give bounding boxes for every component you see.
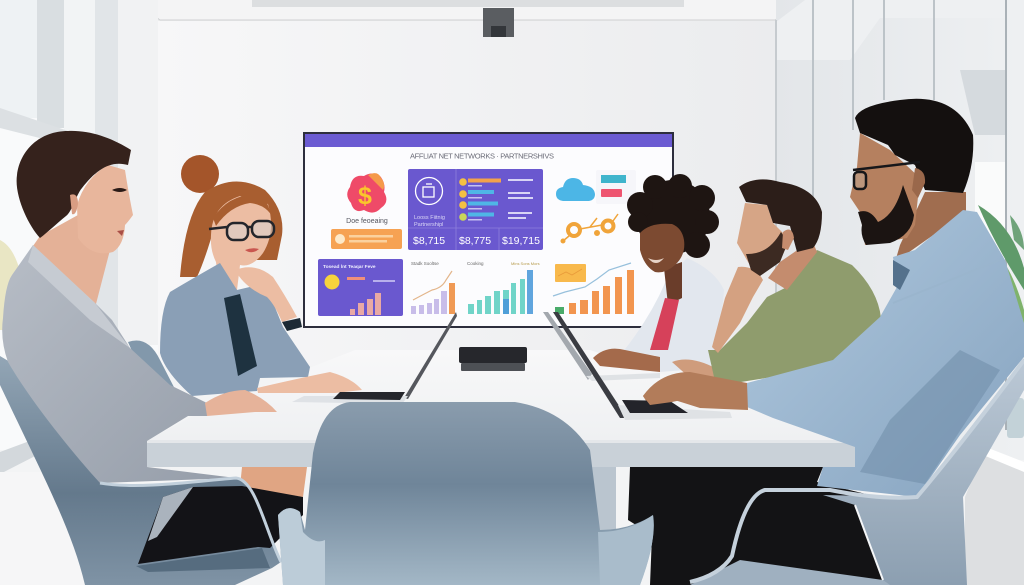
hair [180, 155, 282, 277]
left windows [0, 0, 158, 474]
hair [739, 179, 822, 252]
face [850, 133, 920, 245]
face [737, 203, 790, 275]
ceiling [0, 0, 1024, 22]
glasses [853, 162, 920, 189]
stat values [413, 235, 540, 247]
lips [245, 248, 259, 252]
glasses [209, 221, 274, 240]
lapel [28, 245, 130, 348]
icon: network circle [416, 178, 442, 204]
afro [627, 174, 719, 258]
table [147, 350, 855, 537]
left foreground laptop [292, 312, 457, 404]
forearm and hand [643, 372, 748, 410]
person: woman with glasses and bun [128, 155, 362, 396]
icon: cloud [556, 178, 595, 201]
chair arms [278, 508, 325, 585]
orange button [331, 229, 402, 249]
purple mini chart panel: Tosead lnt Teaqar Feve [323, 264, 376, 270]
blazer [160, 263, 310, 396]
forearm and hand [593, 349, 660, 372]
teal bar chart [467, 261, 540, 314]
right glass wall [775, 0, 1024, 585]
progress bars [459, 178, 501, 221]
ear [782, 230, 794, 250]
icon: dollar splash [347, 173, 386, 213]
face [640, 224, 684, 272]
foreground chair [278, 402, 654, 585]
legs [240, 467, 307, 497]
neck [33, 215, 110, 304]
person: woman with afro hair [593, 174, 724, 372]
center table device [459, 347, 527, 371]
forearm and typing hand [257, 372, 362, 393]
hand at chin [235, 267, 297, 322]
hand over front laptop [643, 374, 705, 405]
ear and earring [70, 194, 78, 214]
screen label: Doe feoeaing [346, 218, 388, 225]
purple stats panel: Partnershipl [414, 222, 443, 228]
chair back and arm [0, 356, 281, 585]
purple mini chart panel [318, 259, 403, 316]
stat values: $19,715 [502, 235, 540, 247]
icon: network gears [561, 214, 618, 243]
trousers [628, 467, 884, 585]
hair [855, 99, 973, 193]
ceiling projector [483, 8, 514, 37]
chair seat [690, 560, 890, 585]
line and bar chart: lilac [411, 261, 455, 314]
back right laptop [543, 312, 660, 381]
stat values: $8,775 [459, 235, 491, 247]
person: woman with short dark hair [0, 131, 307, 585]
shirt [747, 210, 1024, 497]
screen title: AFFLIAT NET NETWORKS · PARTNERSHIVS [410, 152, 554, 160]
teal bar chart: Cooking [467, 261, 484, 266]
red blouse [650, 298, 679, 350]
neck [664, 262, 682, 305]
ear [912, 168, 925, 198]
stat values: $8,715 [413, 235, 445, 247]
hair [17, 131, 131, 238]
jacket hem through opening [148, 487, 193, 541]
screen header bar [305, 134, 672, 147]
neck [895, 192, 966, 262]
person: man with glasses in blue shirt [628, 99, 1024, 585]
panel caption: Looss Fiitnig [414, 215, 445, 221]
orange bar chart [553, 263, 634, 314]
blouse [224, 294, 257, 376]
chair back [823, 358, 1024, 585]
hand on table [205, 390, 277, 416]
cuff [282, 318, 302, 331]
line and bar chart: lilac: Stadk Sooltse [411, 261, 439, 266]
chair arm line [100, 478, 281, 562]
face [77, 165, 133, 253]
skirt through chair opening [138, 486, 303, 564]
hand on table [672, 360, 715, 382]
back wall [158, 21, 776, 366]
front right laptop [553, 312, 732, 420]
blazer [2, 245, 236, 483]
plant [978, 205, 1024, 438]
neck and face [211, 196, 271, 296]
shirt [708, 250, 881, 386]
chair back behind her [128, 340, 178, 395]
forearm and fist [712, 267, 763, 353]
chair arm [690, 360, 1024, 582]
wall screen dashboard [303, 132, 674, 328]
beard [858, 185, 914, 245]
status card [596, 170, 636, 204]
side notes [508, 179, 533, 219]
icon: dollar splash: $ [358, 182, 372, 210]
lips [117, 230, 124, 236]
jacket [622, 258, 724, 372]
purple stats panel [408, 169, 543, 250]
eye [112, 188, 127, 192]
table front edge [147, 440, 855, 467]
beard [746, 232, 788, 276]
neck [768, 240, 817, 290]
person: man in green shirt [672, 179, 881, 386]
teal bar chart: Mins Sons Mors [511, 261, 540, 266]
table leg [578, 467, 616, 537]
left floor [0, 472, 200, 585]
